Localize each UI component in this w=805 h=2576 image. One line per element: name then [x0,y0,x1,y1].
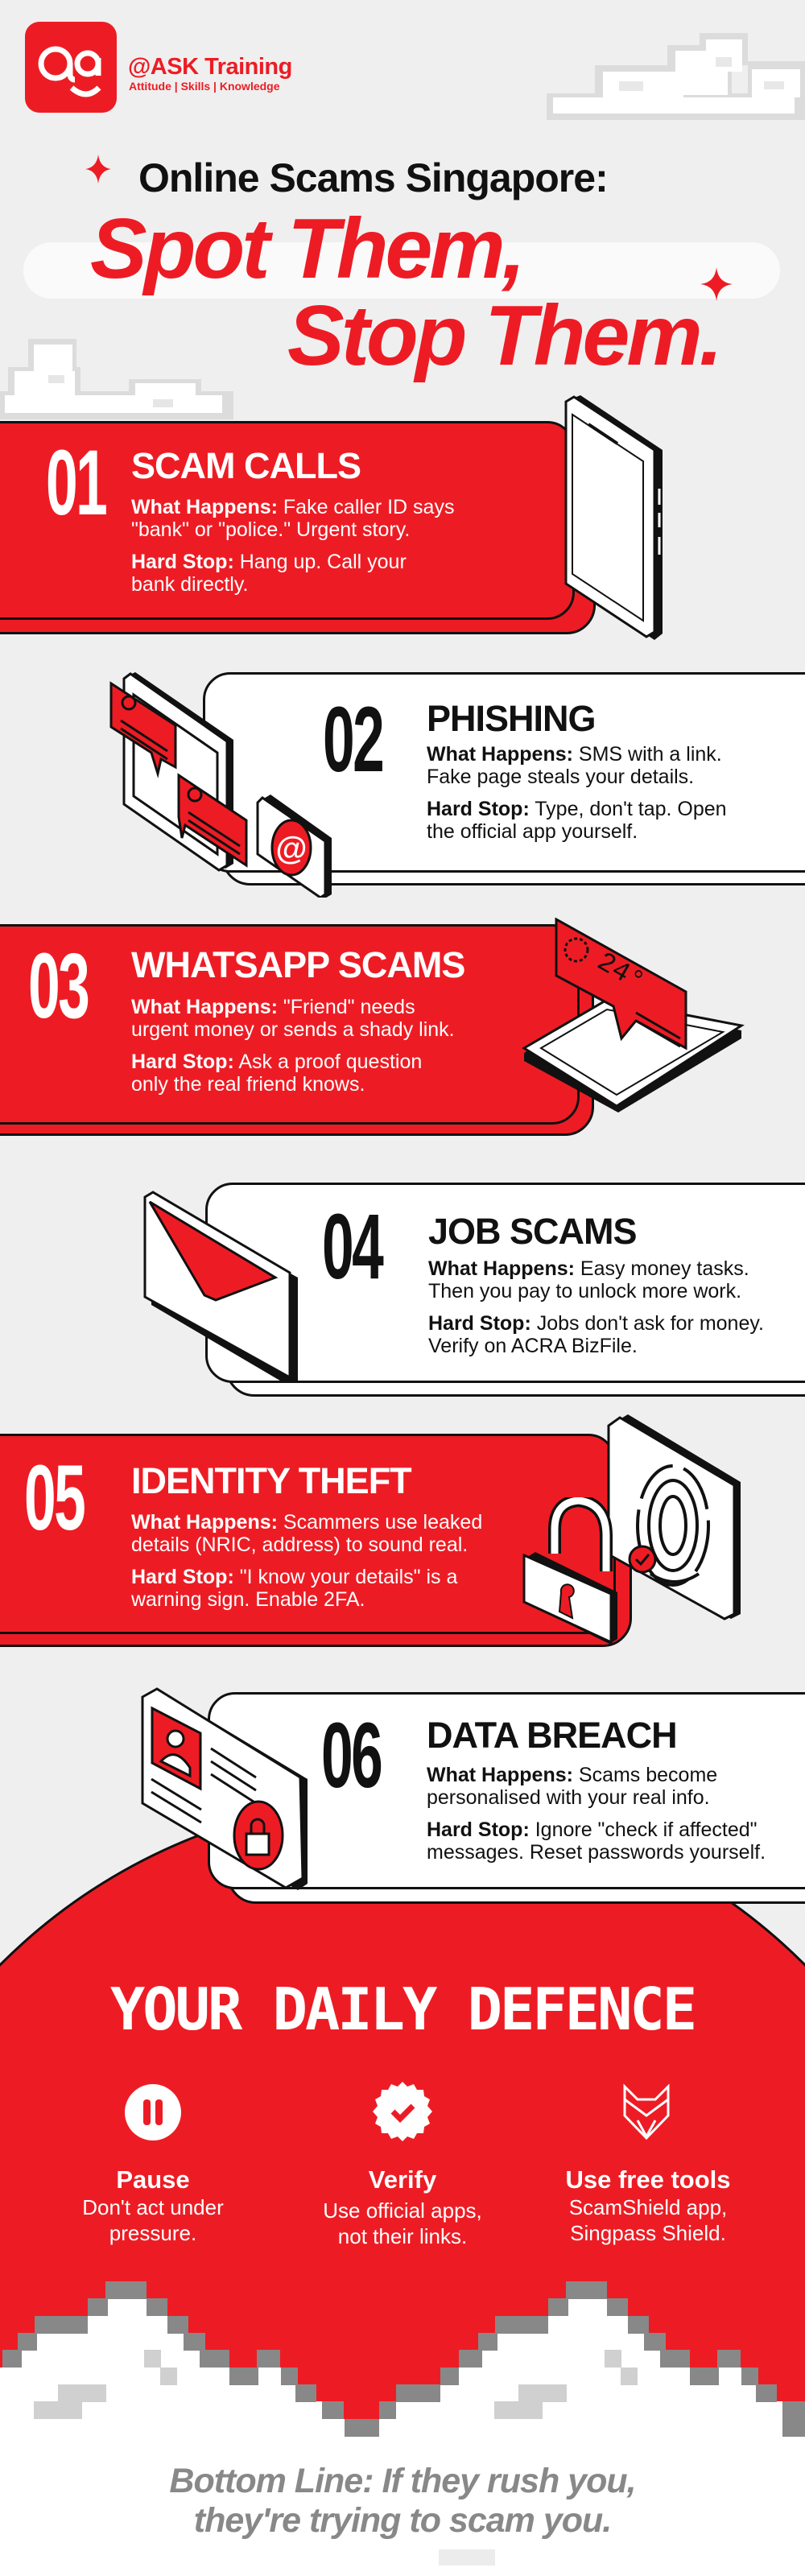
body text [428,1257,764,1357]
bottom line: Bottom Line: If they rush you, [169,2462,636,2500]
body text: Hard Stop: Ask a proof question [131,1051,422,1073]
cloud: top right [547,33,805,120]
column: tools: Singpass Shield. [570,2221,726,2245]
panel 06: data breach [142,1687,805,1904]
heading: JOB SCAMS [428,1211,637,1252]
body text: warning sign. Enable 2FA. [131,1588,365,1611]
number 03: 03 [28,935,88,1038]
icon: phone [565,395,663,640]
heading: your daily defence: YOUR DAILY DEFENCE [110,1975,695,2043]
title: Online Scams Singapore: [138,155,608,200]
headline: Stop Them. [287,288,720,383]
pixel mountains [0,2281,805,2576]
body text: Then you pay to unlock more work. [428,1280,741,1302]
heading: IDENTITY THEFT [131,1460,411,1501]
body text: only the real friend knows. [131,1073,365,1096]
body text: the official app yourself. [427,820,638,843]
bottom line: they're trying to scam you. [194,2501,611,2540]
body text: Hard Stop: Jobs don't ask for money. [428,1312,764,1335]
logo [25,22,292,113]
body text: Fake page steals your details. [427,766,694,788]
body text: Verify on ACRA BizFile. [428,1335,638,1357]
column: tools: Use free tools [565,2165,731,2194]
body text [131,496,454,596]
body text: What Happens: SMS with a link. [427,743,722,766]
body text [131,1511,482,1611]
icon: pause [125,2084,181,2140]
body text [427,1764,766,1864]
logo: @ASK Training [128,54,292,80]
logo: Attitude | Skills | Knowledge [129,80,280,93]
number 06: 06 [321,1704,381,1807]
heading: PHISHING [427,698,596,739]
body text: messages. Reset passwords yourself. [427,1841,766,1864]
body text: bank directly. [131,573,248,596]
title pill background [23,242,780,299]
body text: Hard Stop: Hang up. Call your [131,551,407,573]
number 05: 05 [24,1447,84,1550]
heading: DATA BREACH [427,1715,677,1756]
panel 03: whatsapp scams [0,918,745,1136]
column: pause: Don't act under [82,2195,224,2219]
body text: What Happens: Scams become [427,1764,717,1786]
icon: tablet with weather bubble [522,918,745,1113]
body text: "bank" or "police." Urgent story. [131,518,410,541]
icon: fingerprint tile [607,1414,741,1620]
column: pause [82,2165,224,2245]
column: tools: ScamShield app, [569,2195,727,2219]
body text: Hard Stop: Ignore "check if affected" [427,1818,758,1841]
body text: Hard Stop: Type, don't tap. Open [427,798,727,820]
body text: What Happens: Fake caller ID says [131,496,454,518]
headline: Spot Them, [90,201,522,296]
body text [131,996,455,1096]
body text: Hard Stop: "I know your details" is a [131,1566,457,1588]
number 02: 02 [323,688,382,791]
column: pause: Pause [116,2165,190,2194]
column: tools [565,2165,731,2245]
column: verify: not their links. [338,2224,467,2248]
icon: verify badge [373,2082,432,2141]
icon: padlock [523,1497,617,1644]
sparkle left [85,155,111,184]
panel 05: identity theft [0,1414,741,1647]
icon: tablet with message bubbles and @: @ [275,831,308,866]
number 04: 04 [322,1195,382,1298]
body text [427,743,727,843]
column: pause: pressure. [109,2221,196,2245]
bottom line [169,2462,636,2540]
panel 01: scam calls [0,395,663,640]
panel 02: phishing [109,672,805,898]
body text: personalised with your real info. [427,1786,710,1809]
body text: What Happens: Scammers use leaked [131,1511,482,1534]
body text: What Happens: "Friend" needs [131,996,415,1018]
heading: WHATSAPP SCAMS [131,944,464,985]
icon: tablet with weather bubble: 24° [591,947,650,998]
number 01: 01 [46,431,105,535]
column: verify: Use official apps, [323,2198,482,2223]
headline [90,201,720,383]
icon: envelope [143,1191,298,1381]
column: verify: Verify [369,2165,436,2194]
body text: What Happens: Easy money tasks. [428,1257,749,1280]
icon: fox [623,2083,670,2140]
background: red defence circle [0,1835,805,2419]
body text: details (NRIC, address) to sound real. [131,1534,468,1556]
sparkle right [700,267,733,301]
column: verify [323,2165,482,2248]
icon: tablet with message bubbles and @ [109,672,332,898]
icon: ID card [142,1687,308,1890]
cloud: left [0,339,233,419]
body text: urgent money or sends a shady link. [131,1018,455,1041]
panel 04: job scams [143,1183,805,1397]
heading: SCAM CALLS [131,445,361,486]
